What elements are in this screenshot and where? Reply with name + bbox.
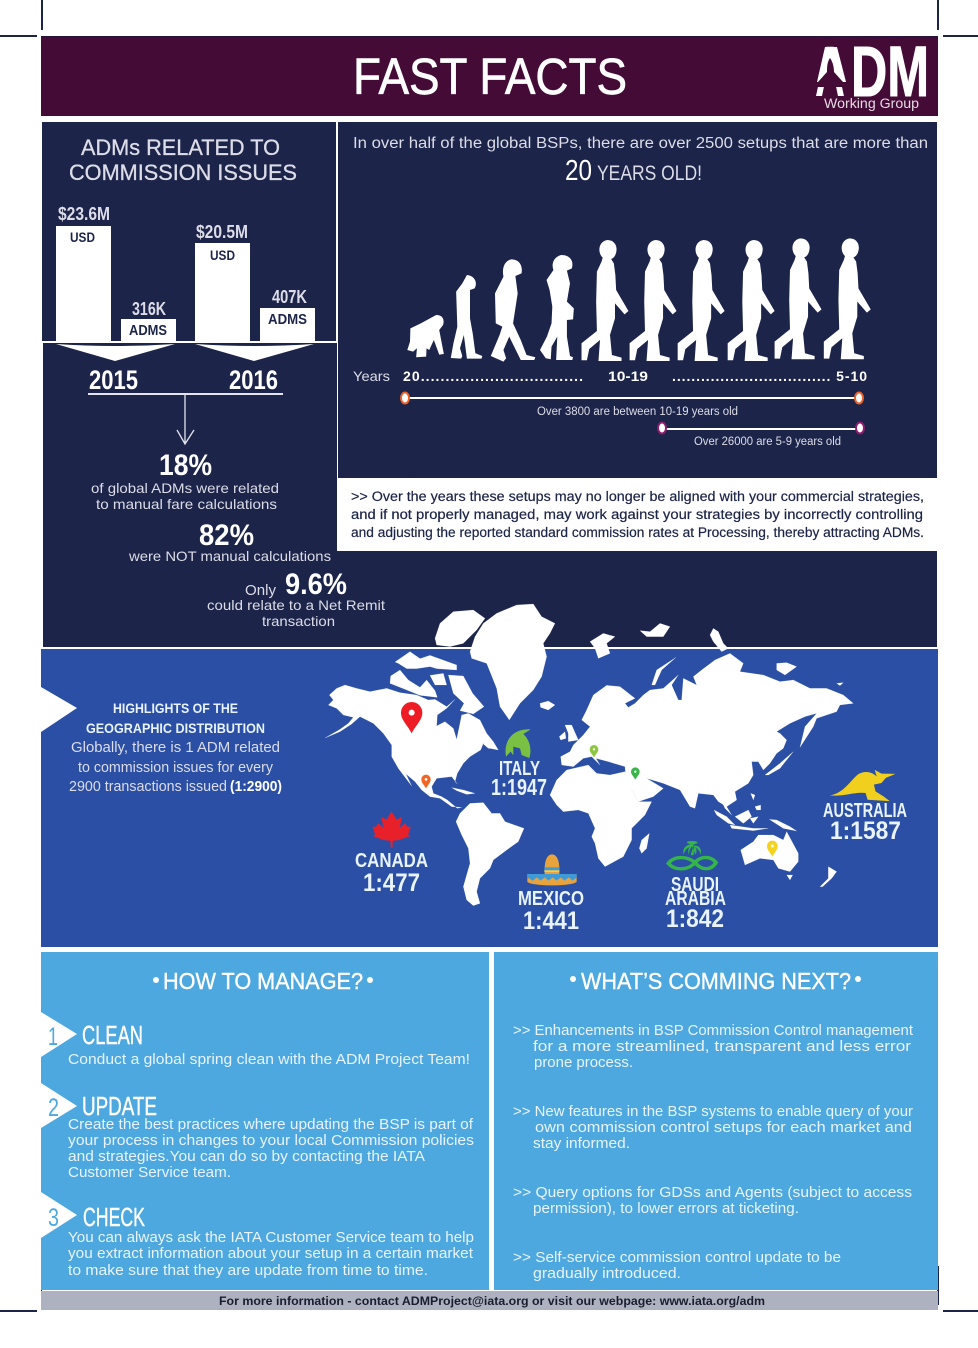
heading: WHAT’S COMMING NEXT?	[581, 968, 851, 994]
timeline bar: 3800 setups: Over 3800 are between 10-19 years old	[537, 406, 738, 418]
Americas north and arctic	[325, 604, 578, 808]
step 3: check	[41, 1192, 474, 1279]
item: enhancements: >> Enhancements in BSP Commission Control management	[513, 1022, 914, 1039]
logo: ADM Working Group: Working Group	[824, 96, 919, 111]
Borneo	[735, 810, 752, 823]
Mexico ratio	[518, 888, 584, 935]
text block: over the years: and if not properly managed, may work against your strategies by incorrectly controlling	[351, 507, 923, 522]
Victoria Island group	[390, 670, 437, 697]
panel: ADMs related to commission issues	[42, 122, 337, 647]
early hominid	[451, 275, 482, 359]
Italy ratio: ITALY	[499, 758, 540, 780]
stat: 18%: of global ADMs were related	[91, 480, 279, 496]
item: new features: >> New features in the BSP systems to enable query of your	[513, 1103, 913, 1120]
Sumatra	[714, 810, 735, 825]
item: enhancements: for a more streamlined, transparent and less error	[533, 1038, 911, 1055]
stat: 82%	[128, 519, 331, 564]
South America and Africa	[456, 765, 652, 906]
country labels	[355, 758, 907, 935]
step 2: update: UPDATE	[82, 1091, 157, 1121]
Ellesmere	[435, 610, 485, 647]
heading: HOW TO MANAGE?	[163, 968, 363, 994]
stat: 9.6%	[207, 568, 385, 629]
panel: geographic distribution	[41, 649, 938, 947]
South East Asia and Oceania	[714, 793, 837, 887]
New Siberian Islands	[777, 663, 843, 686]
item: query options	[513, 1184, 912, 1217]
Mexico ratio: 1:441	[523, 907, 579, 935]
South America	[456, 803, 524, 906]
step 2: update	[41, 1083, 474, 1181]
bar chart: ADMS	[268, 311, 307, 328]
heading: ADMs RELATED TO	[81, 135, 280, 160]
hominid	[491, 259, 535, 362]
Saudi Arabia ratio: SAUDI	[671, 874, 719, 896]
timeline bar: 3800 setups	[401, 392, 863, 418]
panel: how to manage	[41, 952, 489, 1290]
Canada ratio	[355, 850, 428, 897]
icon: sombrero	[527, 854, 577, 885]
Japan	[765, 752, 793, 775]
item: query options: permission), to lower errors at ticketing.	[533, 1200, 799, 1217]
bar chart: $20.5M	[196, 222, 248, 242]
Malay peninsula	[718, 795, 732, 815]
step 1: clean: Conduct a global spring clean with the ADM Project Team!	[68, 1051, 470, 1068]
timeline labels: 10-19	[608, 368, 648, 384]
step 2: update: your process in changes to your local Commission policies	[68, 1132, 474, 1149]
item: enhancements	[513, 1022, 914, 1071]
Australia ratio: AUSTRALIA	[823, 800, 907, 822]
neanderthal	[540, 255, 574, 360]
item: self-service: gradually introduced.	[533, 1265, 681, 1282]
timeline bar: 26000 setups: Over 26000 are 5-9 years old	[694, 436, 841, 448]
Saudi Arabia ratio: 1:842	[666, 905, 724, 933]
stat: 18%: 18%	[159, 449, 212, 482]
Cuba	[452, 788, 475, 794]
timeline labels: Years	[353, 368, 390, 384]
arrow marker	[41, 687, 77, 732]
navy band behind map top	[337, 551, 937, 647]
step 1: clean: CLEAN	[82, 1020, 143, 1050]
Greenland	[470, 604, 555, 720]
Iceland	[540, 701, 555, 710]
icon: red pin	[401, 702, 422, 733]
highlights text: (1:2900)	[230, 779, 282, 795]
Baffin Island	[448, 675, 484, 714]
item: new features: stay informed.	[533, 1135, 630, 1152]
bar chart	[56, 204, 315, 341]
panel: what's coming next	[494, 952, 938, 1290]
highlights text: GEOGRAPHIC DISTRIBUTION	[86, 720, 265, 736]
map pins and country icons	[372, 702, 895, 885]
logo: ADM Working Group: A	[815, 33, 845, 112]
bar chart: USD	[210, 247, 235, 263]
intro text	[353, 135, 928, 187]
UK and Ireland	[559, 725, 578, 742]
icon: green pin	[631, 767, 640, 780]
Svalbard	[590, 633, 615, 658]
Newfoundland	[483, 743, 497, 748]
step 3: check: You can always ask the IATA Customer Service team to help	[68, 1229, 474, 1246]
Tasmania	[787, 875, 793, 880]
New Zealand	[820, 867, 837, 887]
step 2: update: Create the best practices where updating the BSP is part of	[68, 1116, 474, 1133]
step 2: update: 2	[48, 1094, 59, 1122]
step 3: check: 3	[48, 1204, 59, 1232]
New Guinea	[769, 819, 797, 831]
Saudi Arabia ratio	[665, 874, 726, 933]
North America	[325, 685, 498, 808]
year chevrons and labels	[56, 344, 314, 395]
bar chart: $23.6M	[58, 204, 110, 224]
stat: 82%: were NOT manual calculations	[128, 548, 331, 564]
stat: 82%: 82%	[199, 519, 254, 552]
stat: 18%	[91, 449, 279, 512]
step 1: clean	[41, 1012, 470, 1068]
Sulawesi	[750, 817, 758, 823]
Java	[730, 825, 768, 831]
Australia ratio: 1:1587	[830, 817, 901, 845]
Italy ratio: 1:1947	[491, 774, 547, 800]
year chevrons and labels: 2015	[89, 365, 138, 395]
heading	[69, 135, 297, 185]
world map	[325, 604, 853, 906]
highlights text: to commission issues for every	[78, 760, 274, 776]
intro text: YEARS OLD!	[597, 162, 702, 185]
bar chart: USD	[70, 229, 95, 245]
logo: ADM Working Group: DM	[851, 33, 929, 112]
Canada ratio: 1:477	[363, 869, 420, 897]
text block: over the years: >> Over the years these setups may no longer be aligned with your commercial strategies,	[351, 489, 924, 504]
stat: 9.6%: transaction	[262, 613, 335, 629]
icon: kangaroo	[830, 770, 895, 801]
intro text: In over half of the global BSPs, there are over 2500 setups that are more than	[353, 135, 928, 152]
icon: lime pin	[590, 745, 598, 757]
highlights text: 2900 transactions issued	[69, 779, 227, 795]
item: self-service: >> Self-service commission control update to be	[513, 1249, 841, 1266]
timeline labels	[353, 368, 867, 384]
logo: ADM Working Group	[812, 33, 929, 112]
stat: 18%: to manual fare calculations	[96, 496, 277, 512]
highlights text: Globally, there is 1 ADM related	[71, 740, 280, 756]
timeline bar: 26000 setups	[658, 422, 864, 448]
Philippines	[751, 793, 761, 810]
item: new features	[513, 1103, 913, 1152]
item: self-service	[513, 1249, 841, 1282]
title: FAST FACTS	[353, 48, 627, 105]
stat: 9.6%: could relate to a Net Remit	[207, 597, 385, 613]
step 2: update: Customer Service team.	[68, 1164, 231, 1181]
evolution silhouettes	[407, 238, 871, 362]
footer bar	[41, 1291, 938, 1310]
item: enhancements: prone process.	[534, 1054, 633, 1071]
Australia ratio	[823, 800, 907, 845]
panel: setups age	[338, 122, 937, 478]
step 2: update: and strategies.You can do so by contacting the IATA	[68, 1148, 425, 1165]
step 3: check: CHECK	[83, 1202, 145, 1232]
timeline labels: 20.................................	[403, 368, 583, 384]
stat: 9.6%: Only	[245, 582, 277, 599]
timeline labels: ................................. 5-10	[672, 368, 867, 384]
bar chart: ADMS	[129, 322, 167, 339]
heading: COMMISSION ISSUES	[69, 160, 297, 185]
bar chart: 407K	[272, 287, 307, 307]
Eurasia	[561, 623, 853, 808]
stat: 9.6%: 9.6%	[285, 568, 347, 601]
bar chart: 316K	[132, 299, 166, 319]
Severnaya Zemlya	[710, 628, 728, 652]
icon: saudi palm and swords	[668, 841, 716, 869]
item: query options: >> Query options for GDSs and Agents (subject to access	[513, 1184, 912, 1201]
Novaya Zemlya	[652, 657, 676, 685]
text block: over the years: and adjusting the reported standard commission rates at Processing, thereby attracting ADMs.	[351, 525, 924, 540]
year chevrons and labels: 2016	[229, 365, 278, 395]
Australia	[741, 832, 798, 872]
footer bar: For more information - contact ADMProject@iata.org or visit our webpage: www.iata.org/adm	[219, 1294, 765, 1308]
intro text: 20	[565, 155, 592, 187]
step 3: check: to make sure that they are update from time to time.	[68, 1262, 428, 1279]
ape	[407, 315, 444, 357]
Mexico ratio: MEXICO	[518, 888, 584, 910]
Italy ratio	[491, 758, 547, 800]
Queen Elizabeth islands	[395, 652, 457, 670]
header banner	[41, 33, 938, 116]
Madagascar	[639, 833, 649, 853]
step 1: clean: 1	[48, 1023, 58, 1051]
arrow: down	[177, 395, 194, 444]
highlights text	[69, 700, 282, 795]
step 3: check: you extract information about your setup in a certain market	[68, 1245, 474, 1262]
Saudi Arabia ratio: ARABIA	[665, 888, 726, 910]
highlights text: HIGHLIGHTS OF THE	[113, 700, 238, 716]
icon: maple leaf	[372, 811, 411, 848]
Franz Josef Land	[640, 623, 670, 637]
Africa	[550, 765, 652, 867]
item: new features: own commission control setups for each market and	[535, 1119, 912, 1136]
text block: over the years	[337, 478, 937, 551]
icon: spartan helmet	[506, 729, 531, 758]
Canada ratio: CANADA	[355, 850, 428, 872]
icon: yellow pin	[767, 841, 778, 857]
icon: orange pin	[421, 775, 431, 788]
